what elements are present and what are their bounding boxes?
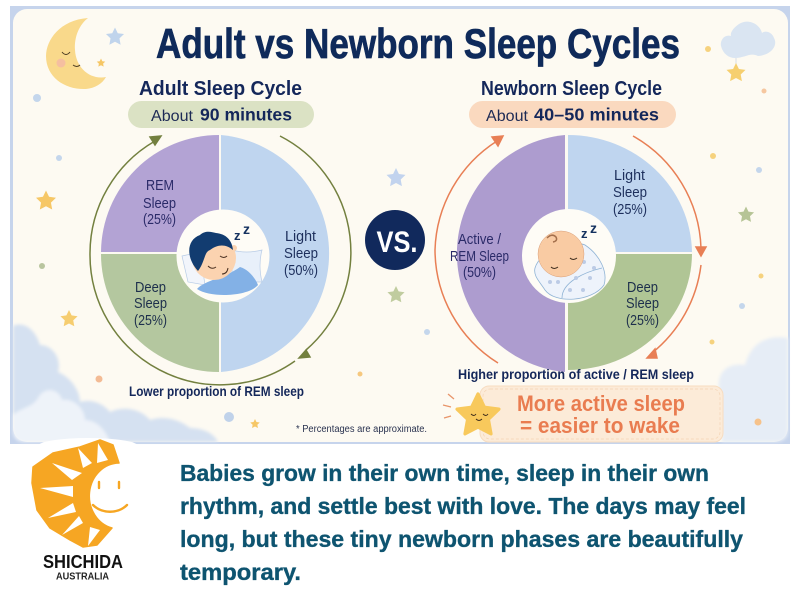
segment: newborn deep sleep: [568, 254, 692, 370]
label: newborn active REM: (50%): [463, 264, 496, 281]
label: adult light sleep: Light: [285, 228, 317, 245]
icon: swaddled baby: z: [581, 226, 588, 241]
adult duration pill: About: [151, 108, 194, 125]
icon: hanging cloud with star: [721, 22, 775, 81]
logo: Shichida Australia: [32, 438, 138, 582]
icon: sleeping adult: z: [234, 228, 241, 243]
label: newborn light sleep: (25%): [613, 201, 647, 218]
arrows: adult cycle ring: [90, 136, 351, 385]
newborn pie chart: [450, 135, 692, 372]
message text: Babies grow in their own time, sleep in their own: [180, 460, 709, 486]
label: adult deep sleep: Sleep: [134, 295, 167, 312]
newborn duration pill: 40–50 minutes: [534, 104, 659, 124]
message text: temporary.: [180, 559, 301, 585]
callout: more active sleep: More active sleep: [517, 391, 685, 416]
VS badge: VS.: [376, 226, 418, 259]
segment: newborn light sleep: [568, 135, 692, 252]
clouds: bottom right: [719, 337, 788, 442]
arrows: newborn cycle ring: [435, 136, 706, 363]
adult duration pill: [128, 101, 314, 128]
adult caption: Lower proportion of REM sleep: [129, 383, 304, 399]
label: adult light sleep: Sleep: [284, 245, 318, 262]
message text: long, but these tiny newborn phases are beautifully: [180, 526, 743, 552]
VS badge: [365, 210, 425, 270]
icon: crescent moon: [46, 18, 106, 89]
label: REM sleep: (25%): [143, 211, 176, 228]
newborn caption: Higher proportion of active / REM sleep: [458, 366, 694, 382]
message text: rhythm, and settle best with love. The days may feel: [180, 493, 746, 519]
adult pie chart: [101, 135, 329, 372]
label: newborn deep sleep: (25%): [626, 312, 659, 329]
callout: more active sleep: = easier to wake: [520, 413, 680, 438]
footnote: * Percentages are approximate.: [296, 424, 427, 435]
label: newborn light sleep: Sleep: [613, 184, 647, 201]
adult heading: Adult Sleep Cycle: [139, 78, 302, 100]
decorative stars: [33, 28, 766, 428]
icon: smiling star: [443, 394, 499, 434]
label: adult deep sleep: Deep: [135, 279, 166, 296]
newborn duration pill: About: [486, 108, 529, 125]
label: REM sleep: REM: [146, 177, 174, 194]
label: newborn active REM: REM Sleep: [450, 248, 509, 265]
title: Adult vs Newborn Sleep Cycles: [156, 20, 680, 67]
segment: adult deep sleep: [101, 254, 219, 372]
logo: Shichida Australia: AUSTRALIA: [56, 570, 109, 582]
adult duration pill: 90 minutes: [200, 104, 292, 124]
label: newborn light sleep: Light: [614, 167, 646, 184]
segment: adult light sleep: [221, 135, 329, 372]
clouds: bottom left: [13, 324, 218, 442]
label: newborn deep sleep: Sleep: [626, 295, 659, 312]
icon: swaddled baby: [535, 220, 605, 299]
label: newborn deep sleep: Deep: [627, 279, 658, 296]
center circle: newborn: [522, 209, 616, 303]
label: adult deep sleep: (25%): [134, 312, 167, 329]
logo smile: [93, 482, 127, 512]
background panel: [10, 6, 790, 444]
label: newborn active REM: Active /: [458, 231, 502, 248]
segment: newborn active REM: [457, 135, 565, 372]
icon: sleeping adult: [182, 221, 262, 295]
center circle: adult: [176, 210, 270, 302]
logo sun: [32, 440, 127, 547]
segment: adult REM sleep: [101, 135, 219, 252]
icon: swaddled baby: z: [590, 220, 597, 236]
label: REM sleep: Sleep: [143, 195, 176, 212]
icon: sleeping adult: z: [243, 221, 250, 237]
callout: more active sleep: [480, 386, 723, 442]
label: adult light sleep: (50%): [284, 262, 318, 279]
newborn duration pill: [469, 101, 676, 128]
newborn heading: Newborn Sleep Cycle: [481, 78, 662, 100]
logo: Shichida Australia: SHICHIDA: [43, 552, 123, 572]
